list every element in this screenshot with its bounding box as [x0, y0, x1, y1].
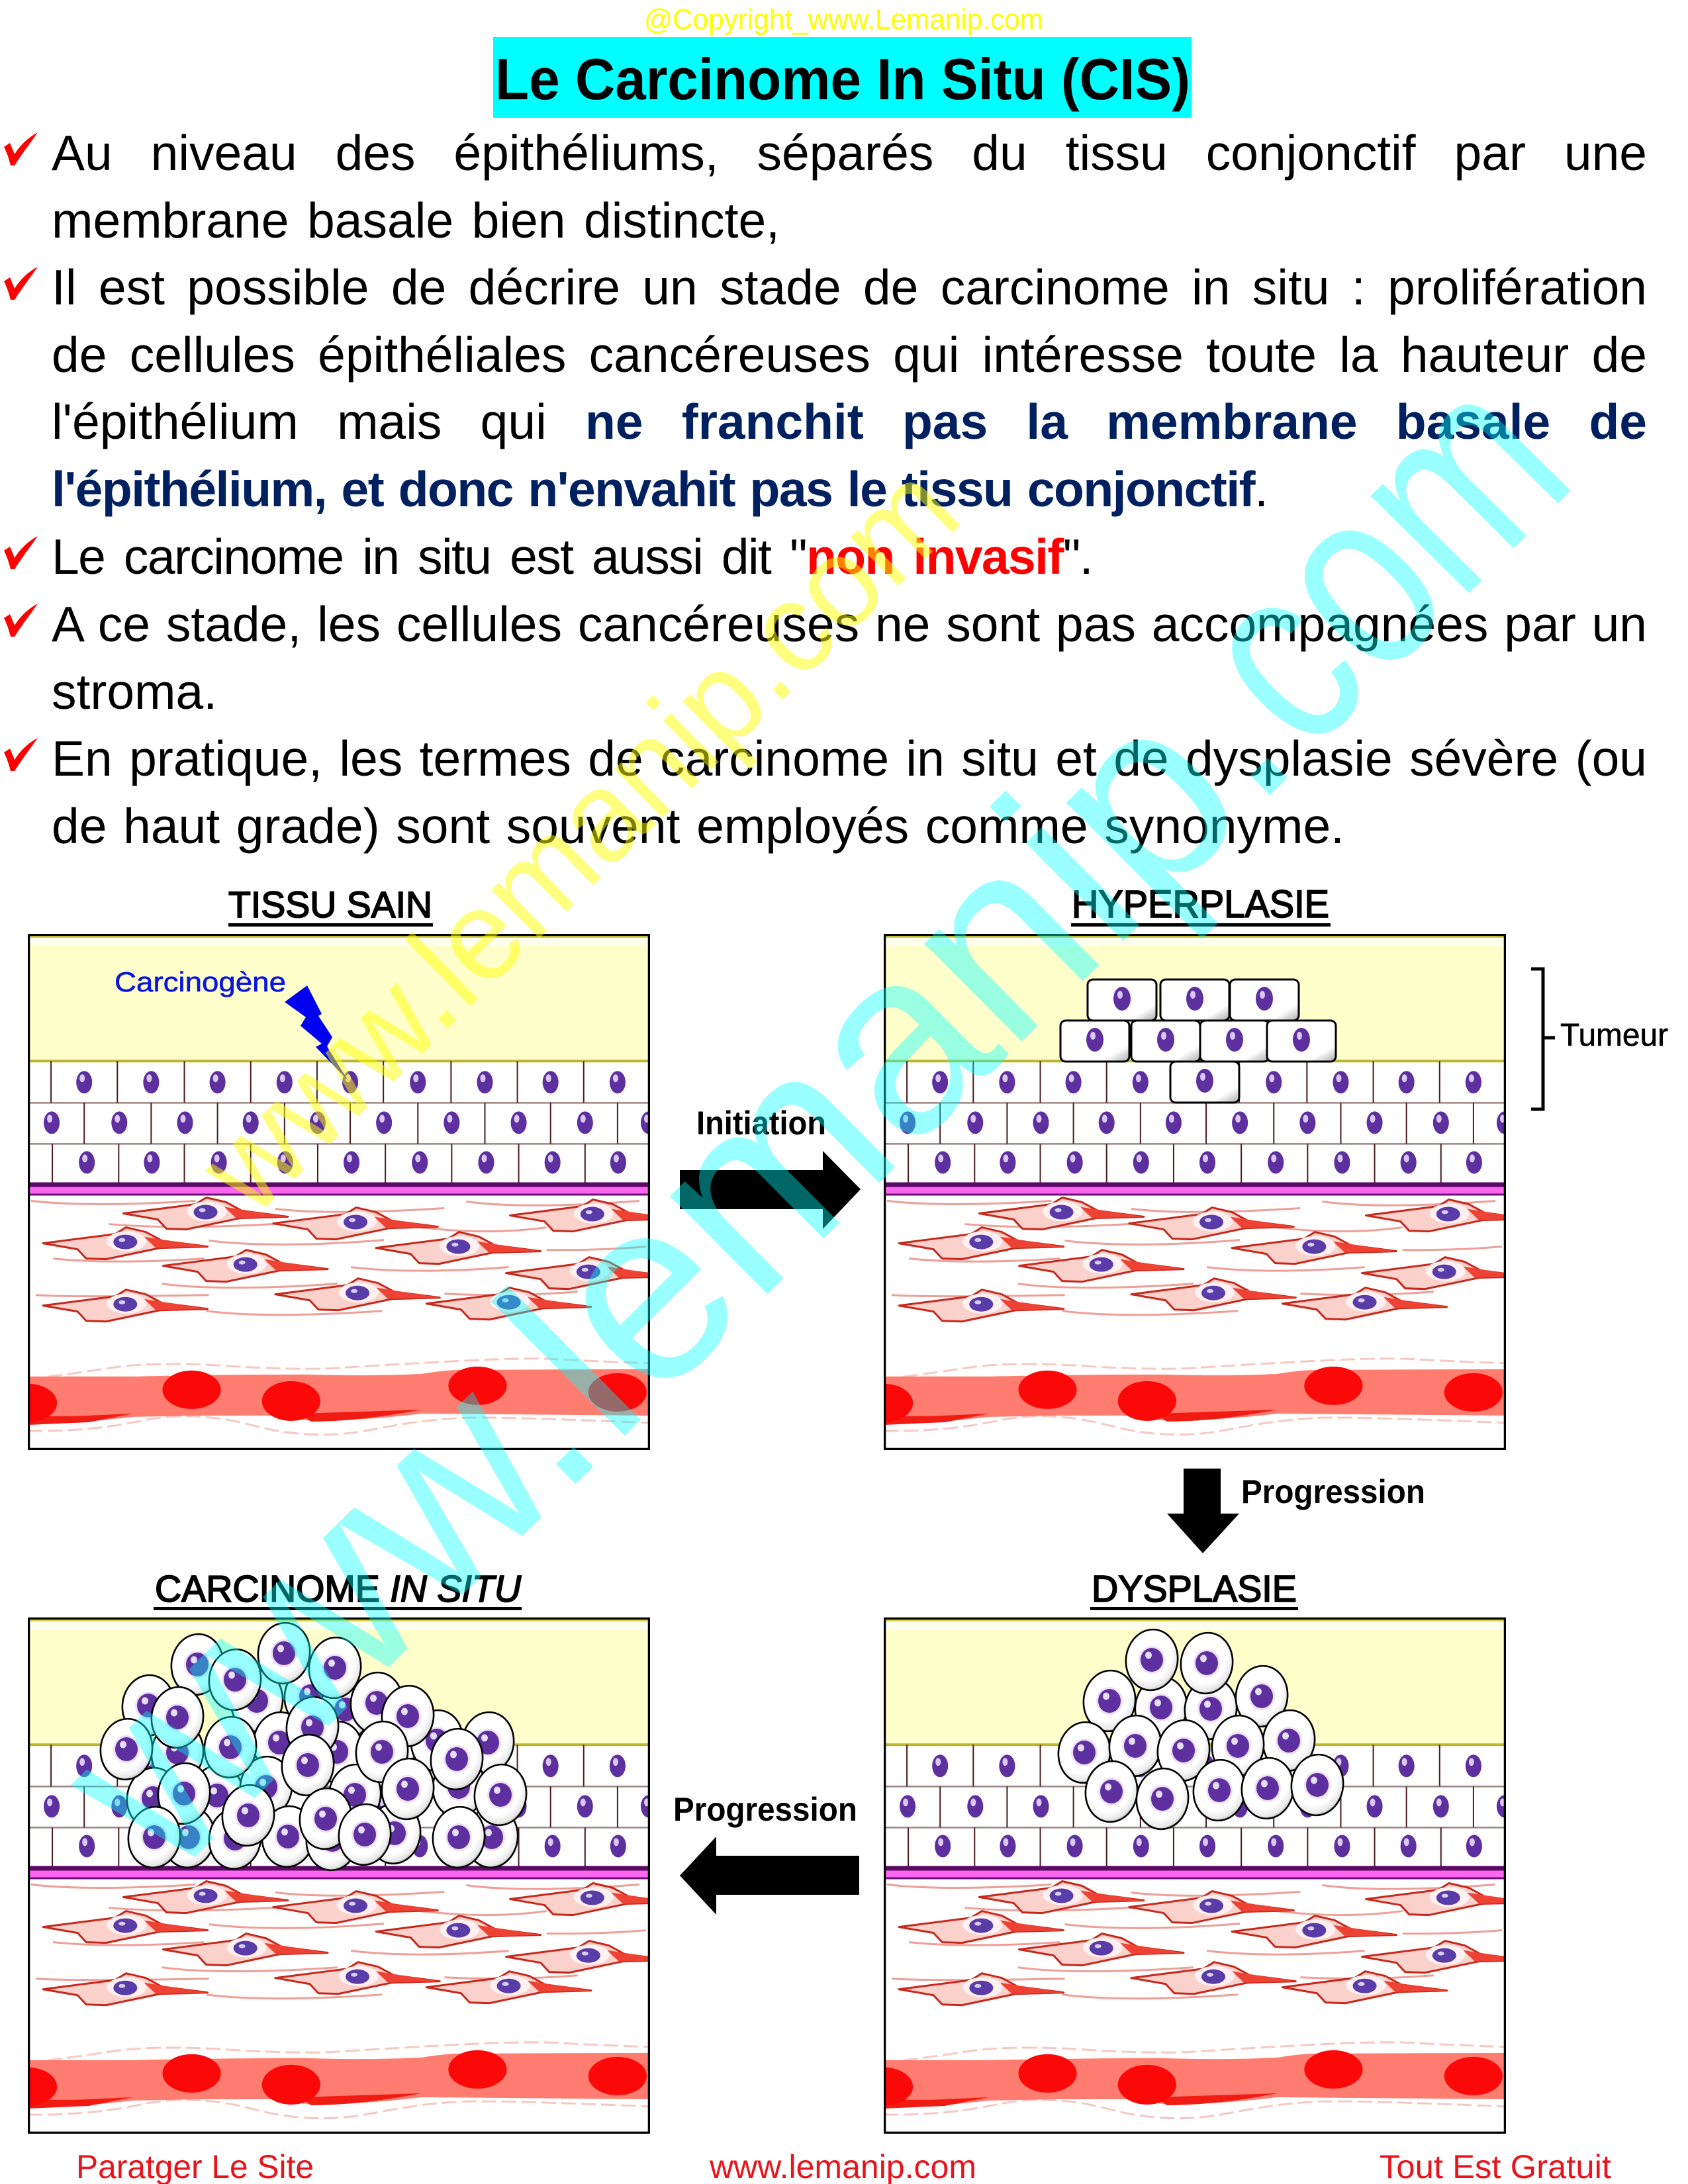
icon: blue lightning bolt [285, 985, 348, 1081]
panel: tissu sain [0, 934, 675, 1450]
panel: dysplasie [855, 1617, 1530, 2134]
watermark: cyan: www. [0, 1281, 649, 1926]
label: carcinogène: Carcinogène [115, 966, 286, 997]
title banner: Le Carcinome In Situ (CIS) [495, 46, 1190, 112]
watermark: yellow: www.lemanip.com [171, 436, 985, 1240]
heading: carcinome in situ: CARCINOME IN SITU [155, 1568, 522, 1610]
bullet 2: l'épithélium mais qui ne franchit pas la membrane basale de [52, 394, 1647, 449]
watermark: cyan [0, 314, 1620, 1926]
bracket: tumeur: Tumeur [1560, 1018, 1668, 1053]
label: progression right: Progression [1241, 1473, 1425, 1510]
label: initiation: Initiation [696, 1105, 826, 1142]
text block: bullet list [4, 125, 1647, 854]
heading: tissu sain: TISSU SAIN [228, 884, 432, 925]
bullet 2: Il est possible de décrire un stade de carcinome in situ : prolifération [52, 259, 1647, 315]
bullet 5: En pratique, les termes de carcinome in situ et de dysplasie sévère (ou [52, 731, 1647, 786]
bullet 2: de cellules épithéliales cancéreuses qui intéresse toute la hauteur de [52, 327, 1647, 383]
bracket: tumeur [1531, 969, 1668, 1109]
dysplastic cell mass [1055, 1626, 1347, 1833]
heading: hyperplasie: HYPERPLASIE [1072, 883, 1329, 926]
arrow: progression left [680, 1837, 859, 1915]
bullet 1: Au niveau des épithéliums, séparés du tissu conjonctif par une [52, 125, 1647, 181]
bullet 4 [4, 596, 1647, 719]
bullet 3: Le carcinome in situ est aussi dit "non invasif". [52, 529, 1092, 584]
label: progression left: Progression [673, 1791, 857, 1828]
bullet 4: A ce stade, les cellules cancéreuses ne sont pas accompagnées par un [52, 596, 1647, 652]
bullet 2 [4, 259, 1647, 517]
arrow: progression down [1167, 1469, 1239, 1553]
bullet 5 [4, 731, 1647, 854]
cancer cell mass [97, 1619, 530, 1874]
bullet 2: l'épithélium, et donc n'envahit pas le tissu conjonctif. [52, 461, 1268, 517]
bullet 1 [4, 125, 1647, 248]
bullet 4: stroma. [52, 664, 217, 719]
bullet 1: membrane basale bien distincte, [52, 193, 780, 248]
copyright line: @Copyright_www.Lemanip.com [644, 3, 1043, 36]
watermark: cyan: com [1137, 314, 1620, 797]
bullet 5: de haut grade) sont souvent employés comme synonyme. [52, 798, 1344, 854]
tumour cell pile [1060, 979, 1336, 1103]
panel: hyperplasie [855, 934, 1530, 1450]
watermark: cyan: lemanip. [445, 593, 1344, 1488]
arrow: initiation [680, 1151, 861, 1229]
panel: carcinome in situ [0, 1617, 675, 2134]
heading: dysplasie: DYSPLASIE [1092, 1568, 1297, 1610]
